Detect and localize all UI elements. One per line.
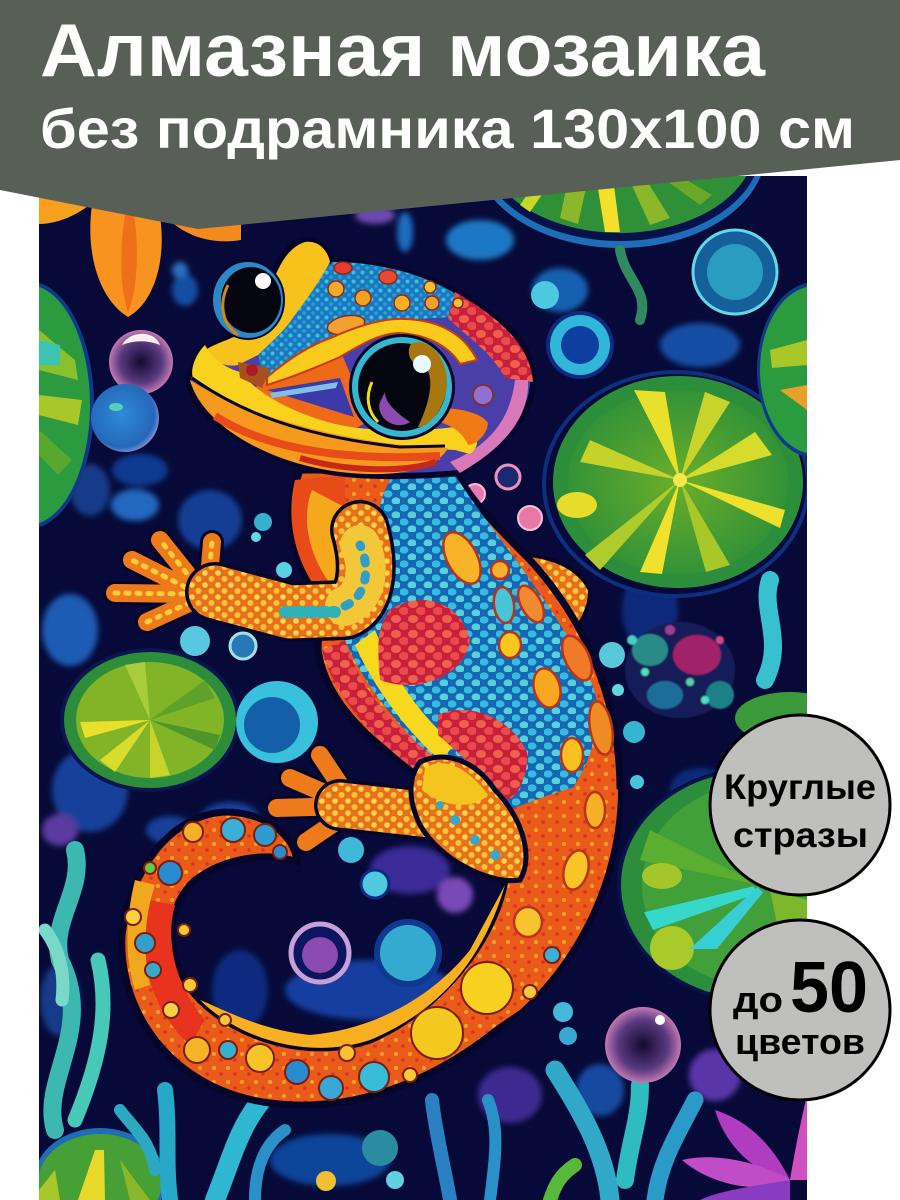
seaweed: bottom left <box>45 850 285 1200</box>
yellow brow <box>267 319 477 385</box>
head spots <box>326 262 493 405</box>
badge: round rhinestones: Круглые <box>724 768 876 807</box>
lily pad: left edge <box>39 282 94 528</box>
bubbles <box>91 230 777 1191</box>
back limb <box>528 552 592 624</box>
speckled coral patch <box>625 622 735 718</box>
title: Алмазная мозаика <box>40 8 766 92</box>
painting: gecko mosaic <box>39 176 807 1200</box>
cheek triangle <box>267 378 354 417</box>
nostril patch <box>238 362 270 388</box>
lily pad: top <box>494 176 761 248</box>
eye: left <box>212 261 284 339</box>
header banner <box>0 0 900 229</box>
body and tail <box>122 470 620 1105</box>
badge: up to 50 colours: цветов <box>735 1021 865 1062</box>
head <box>188 240 533 476</box>
badge: up to 50 colours: до <box>733 979 783 1020</box>
tail spots <box>125 818 560 1100</box>
blue water blobs <box>40 206 741 1186</box>
front arm and hand <box>115 530 366 622</box>
body spots <box>436 526 617 937</box>
icon: purple flower bottom right <box>682 1095 807 1200</box>
eye: right <box>349 334 455 440</box>
lily pad: lower right <box>617 692 807 996</box>
forehead <box>258 262 455 376</box>
jaw <box>190 380 448 474</box>
face under brow <box>256 356 364 428</box>
badge: round rhinestones: стразы <box>733 816 868 855</box>
head base <box>188 240 533 476</box>
rear leg and foot <box>277 755 526 881</box>
lily pad: right <box>542 370 810 598</box>
cheek orange <box>441 408 488 445</box>
subtitle: без подрамника 130х100 см <box>40 97 855 160</box>
pink edge <box>450 380 528 473</box>
lily pad: right edge <box>757 282 807 458</box>
badge: up to 50 colours <box>710 920 890 1100</box>
yellow stripe from eye to snout <box>205 242 330 366</box>
icon: orange flower top left <box>39 190 241 317</box>
lily pad: left <box>60 648 240 792</box>
badge: up to 50 colours: 50 <box>790 948 868 1028</box>
gecko <box>115 240 620 1105</box>
upper lip <box>192 345 477 454</box>
seaweed: bottom centre and right <box>432 250 773 1200</box>
red cheek patch <box>448 292 533 382</box>
lily pad: bottom left <box>34 1128 166 1200</box>
badge: round rhinestones <box>710 715 890 895</box>
